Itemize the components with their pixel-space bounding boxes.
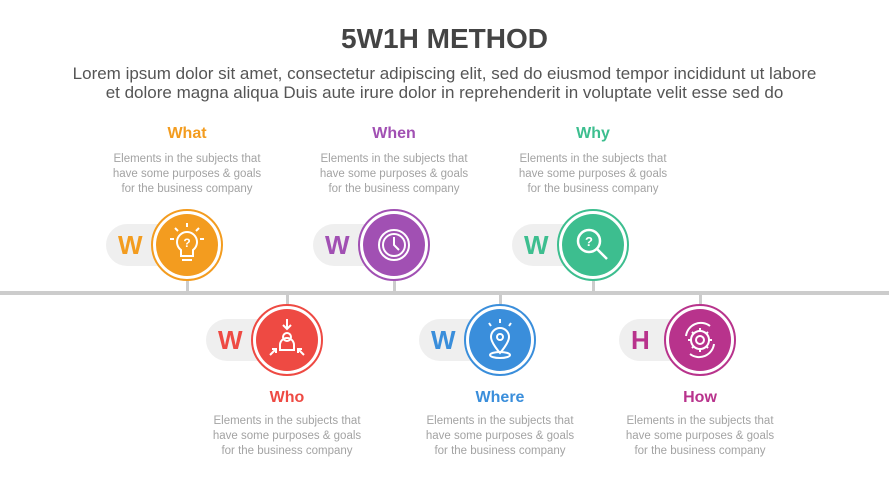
item: when: W [325, 230, 350, 260]
item: how: have some purposes & goals [626, 430, 774, 442]
subtitle: Lorem ipsum dolor sit amet, consectetur adipiscing elit, sed do eiusmod tempor incididunt ut labore [73, 64, 816, 83]
item: how: for the business company [634, 445, 766, 457]
item: how: H [631, 325, 650, 355]
item: where: W [431, 325, 456, 355]
item: when: When [372, 125, 416, 142]
item: where: Elements in the subjects that [426, 415, 574, 427]
item: who: Who [270, 389, 304, 406]
item: what: have some purposes & goals [113, 168, 261, 180]
subtitle [73, 64, 816, 102]
item: where [419, 295, 574, 457]
item: what: ? [183, 236, 191, 250]
item: where: have some purposes & goals [426, 430, 574, 442]
item: what: W [118, 230, 143, 260]
item: why: W [524, 230, 549, 260]
item: why: Why [576, 125, 610, 142]
title: 5W1H METHOD [341, 23, 548, 54]
item: who: have some purposes & goals [213, 430, 361, 442]
item: why: Elements in the subjects that [519, 153, 667, 165]
item: where: Where [476, 389, 524, 406]
item: who [206, 295, 361, 457]
item: who: Elements in the subjects that [213, 415, 361, 427]
item: how: Elements in the subjects that [626, 415, 774, 427]
item: who: W [218, 325, 243, 355]
item: what: Elements in the subjects that [113, 153, 261, 165]
item: when: have some purposes & goals [320, 168, 468, 180]
item: why: ? [585, 234, 593, 249]
item: how: How [683, 389, 717, 406]
timeline line [0, 291, 889, 295]
item: when: for the business company [328, 183, 460, 195]
item: why [512, 125, 667, 291]
item: what: What [167, 125, 207, 142]
item: where: for the business company [434, 445, 566, 457]
item: when [313, 125, 468, 291]
item: who: for the business company [221, 445, 353, 457]
item: what [106, 125, 261, 291]
item: what: for the business company [121, 183, 253, 195]
item: why: for the business company [527, 183, 659, 195]
item: when: Elements in the subjects that [320, 153, 468, 165]
subtitle: et dolore magna aliqua Duis aute irure dolor in reprehenderit in voluptate velit esse sed do [106, 83, 783, 102]
item: why: have some purposes & goals [519, 168, 667, 180]
item: how [619, 295, 774, 457]
